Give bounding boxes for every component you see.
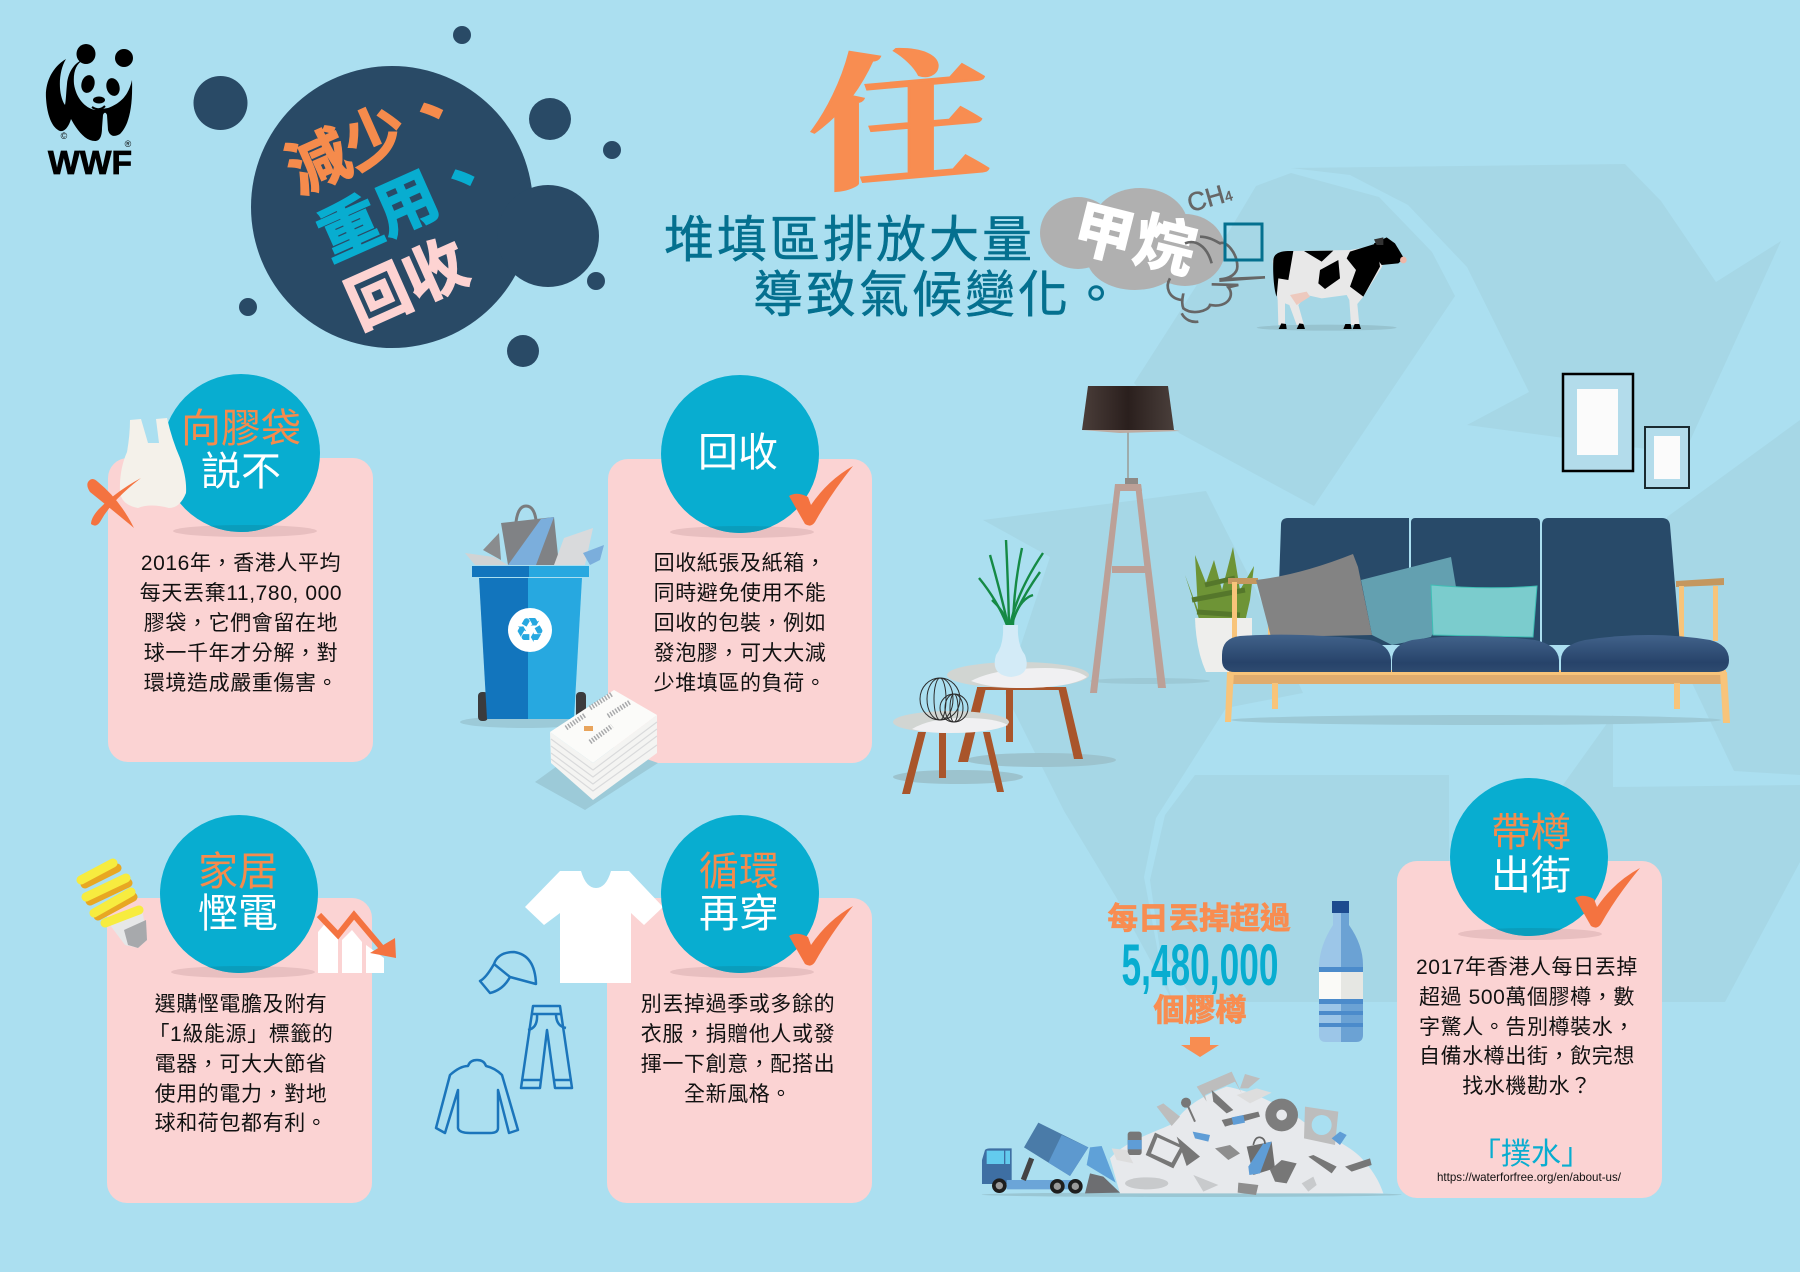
panel: reuse clothes	[525, 815, 872, 1203]
text block: 選購慳電膽及附有	[155, 993, 327, 1016]
missing-glyph box	[1225, 224, 1262, 260]
slogan: reduce reuse recycle: 重用、	[308, 136, 506, 274]
text block: 2016年，香港人平均	[141, 552, 341, 575]
truck	[982, 1123, 1120, 1194]
cow with fart	[1168, 237, 1407, 331]
text block: 別丟掉過季或多餘的	[641, 993, 835, 1016]
furniture: side tables	[893, 540, 1116, 794]
text block: 同時避免使用不能	[654, 582, 826, 605]
text block: 發泡膠，可大大減	[654, 642, 826, 665]
slogan: reduce reuse recycle	[277, 69, 506, 342]
icon: recycling bin	[460, 506, 604, 728]
panel: say no to plastic bags: 向膠袋	[181, 407, 301, 451]
panel: say no to plastic bags: 説不	[201, 450, 281, 494]
furniture: floor lamp	[1082, 386, 1210, 693]
seat and frame	[1229, 672, 1726, 684]
stat: bottles thrown away daily: 5,480,000	[1122, 933, 1278, 998]
link: water for free: 「撲水」	[1471, 1138, 1591, 1171]
text block: 每天丟棄11,780, 000	[140, 582, 342, 605]
arrow: down	[1181, 1037, 1219, 1057]
icon: stack of paper	[535, 690, 658, 810]
panel: recycle	[608, 375, 872, 763]
heading: landfill methane: 導致氣候變化。	[753, 267, 1124, 323]
text block: 回收的包裝，例如	[654, 612, 826, 635]
icon: grass	[979, 540, 1043, 625]
icon: plastic bottle	[1319, 901, 1363, 1042]
text block	[641, 993, 835, 1106]
text block	[654, 552, 826, 695]
icon: tick	[789, 906, 853, 966]
logo: WWF panda: ®	[125, 139, 132, 149]
panel: bring your own bottle: 帶樽	[1491, 811, 1571, 855]
icon: cross	[87, 478, 141, 528]
text block: 字驚人。告別樽裝水，	[1419, 1016, 1635, 1039]
furniture: plant in pot	[1185, 547, 1254, 672]
slogan: reduce reuse recycle: 回收	[337, 229, 478, 342]
icon: tick	[789, 466, 853, 526]
text block: 使用的電力，對地	[155, 1083, 327, 1106]
stat: bottles thrown away daily: 每日丟掉超過	[1108, 902, 1290, 936]
text block	[1416, 956, 1638, 1098]
slogan: reduce reuse recycle: 減少、	[277, 69, 475, 208]
icon: wire balls	[920, 678, 968, 722]
furniture: sofa	[1222, 518, 1730, 725]
panel: reuse clothes: 循環	[699, 850, 779, 894]
icon: recycling bin: ♻	[515, 611, 545, 651]
text block: 環境造成嚴重傷害。	[144, 672, 338, 695]
illustration: garbage truck and pile	[982, 1072, 1402, 1197]
methane cloud: 烷	[1128, 206, 1202, 286]
text block: 全新風格。	[684, 1083, 792, 1106]
stat: bottles thrown away daily: 個膠樽	[1154, 993, 1246, 1028]
text block: 回收紙張及紙箱，	[654, 552, 826, 575]
text block: 電器，可大大節省	[155, 1053, 327, 1076]
panel: say no to plastic bags	[87, 374, 373, 762]
icon: plastic bag	[120, 418, 186, 508]
logo: WWF panda	[46, 44, 133, 181]
text block: 超過 500萬個膠樽，數	[1419, 986, 1635, 1009]
icon: tick	[1575, 868, 1640, 928]
text block: 少堆填區的負荷。	[654, 672, 826, 695]
panel: recycle: 回收	[698, 431, 778, 475]
text block: 2017年香港人每日丟掉	[1416, 956, 1638, 979]
methane cloud: CH4	[1184, 177, 1236, 218]
logo: WWF panda: ©	[61, 131, 68, 141]
methane cloud: 甲	[1067, 194, 1141, 274]
link: water for free: https://waterforfree.org/en/about-us/	[1437, 1170, 1622, 1184]
heading: landfill methane: 堆填區排放大量	[664, 212, 1035, 268]
text block: 自備水樽出街，飲完想	[1419, 1045, 1635, 1068]
panel: bring your own bottle: 出街	[1491, 854, 1571, 898]
panel: bring your own bottle	[1397, 778, 1662, 1198]
icons: clothes outlines	[436, 952, 572, 1133]
icon: light bulb	[81, 863, 147, 948]
cushions	[1361, 557, 1456, 645]
text block: 揮一下創意，配搭出	[641, 1053, 835, 1076]
text block: 膠袋，它們會留在地	[144, 612, 338, 635]
text block: 「1級能源」標籤的	[148, 1023, 334, 1046]
panel: home energy saving: 家居	[198, 850, 278, 894]
splash: dark circles behind slogan	[194, 26, 621, 367]
text block: 衣服，捐贈他人或發	[641, 1023, 835, 1046]
panel: home energy saving	[81, 815, 396, 1203]
text block	[148, 993, 334, 1135]
panel: reuse clothes: 再穿	[699, 892, 779, 936]
icon: falling chart	[318, 915, 396, 973]
pile items	[1112, 1072, 1372, 1195]
text block: 球和荷包都有利。	[155, 1112, 327, 1135]
text block: 找水機勘水？	[1462, 1075, 1592, 1098]
furniture: wall frames	[1563, 374, 1689, 488]
icon: vase	[995, 625, 1027, 677]
text block	[140, 552, 342, 695]
methane cloud	[1040, 177, 1236, 290]
heading: landfill methane	[664, 212, 1124, 323]
link: water for free	[1437, 1138, 1622, 1184]
text block: 球一千年才分解，對	[144, 642, 338, 665]
logo: WWF panda: WWF	[48, 144, 132, 181]
panel: home energy saving: 慳電	[198, 892, 278, 936]
title: 住: 住	[809, 0, 991, 222]
stat: bottles thrown away daily	[1108, 902, 1290, 1028]
icon: t-shirt	[525, 871, 663, 983]
